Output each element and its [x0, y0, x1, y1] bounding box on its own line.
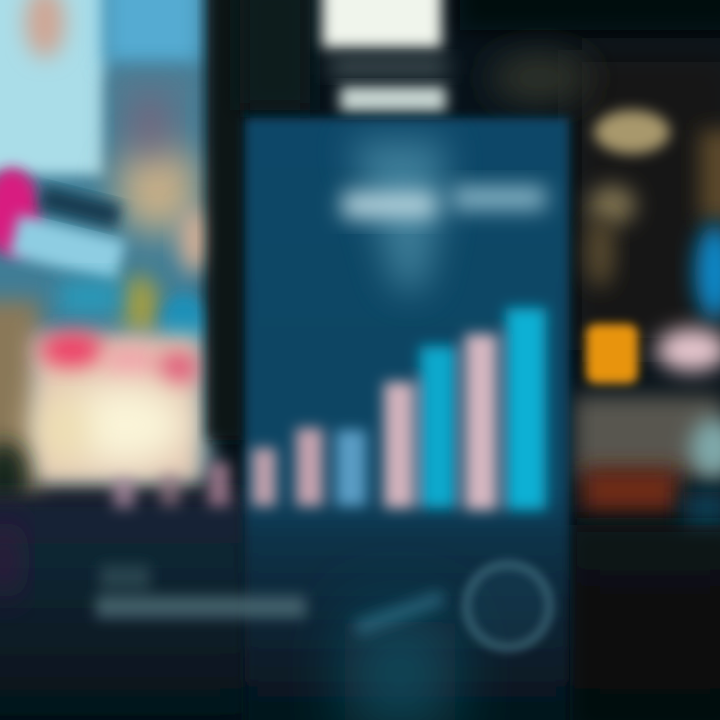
bar 5: [296, 428, 323, 506]
panel: central chart board: [96, 118, 569, 720]
bar 2: [160, 474, 180, 506]
dark pillar: [208, 0, 244, 440]
bar 9: [465, 334, 497, 510]
bar 1: [113, 478, 135, 508]
bar 7: [384, 382, 414, 508]
blurred caption text: [96, 565, 446, 636]
heading: blurred title: [342, 186, 546, 218]
bar 8: [420, 346, 456, 508]
icon: blurred circle: [466, 564, 550, 648]
panel: ceiling light: [240, 0, 720, 112]
bar 10: [506, 308, 546, 510]
bar 3: [208, 462, 230, 506]
reflection glow: [345, 580, 455, 720]
blurred funnel shape under title: [350, 140, 445, 290]
panel: right blurred shop: [490, 50, 720, 542]
bar chart: [113, 308, 546, 510]
bar 4: [252, 448, 276, 506]
bar 6: [336, 430, 366, 506]
panel: left storefront: [0, 0, 211, 514]
panel: reflective floor: [0, 495, 720, 720]
